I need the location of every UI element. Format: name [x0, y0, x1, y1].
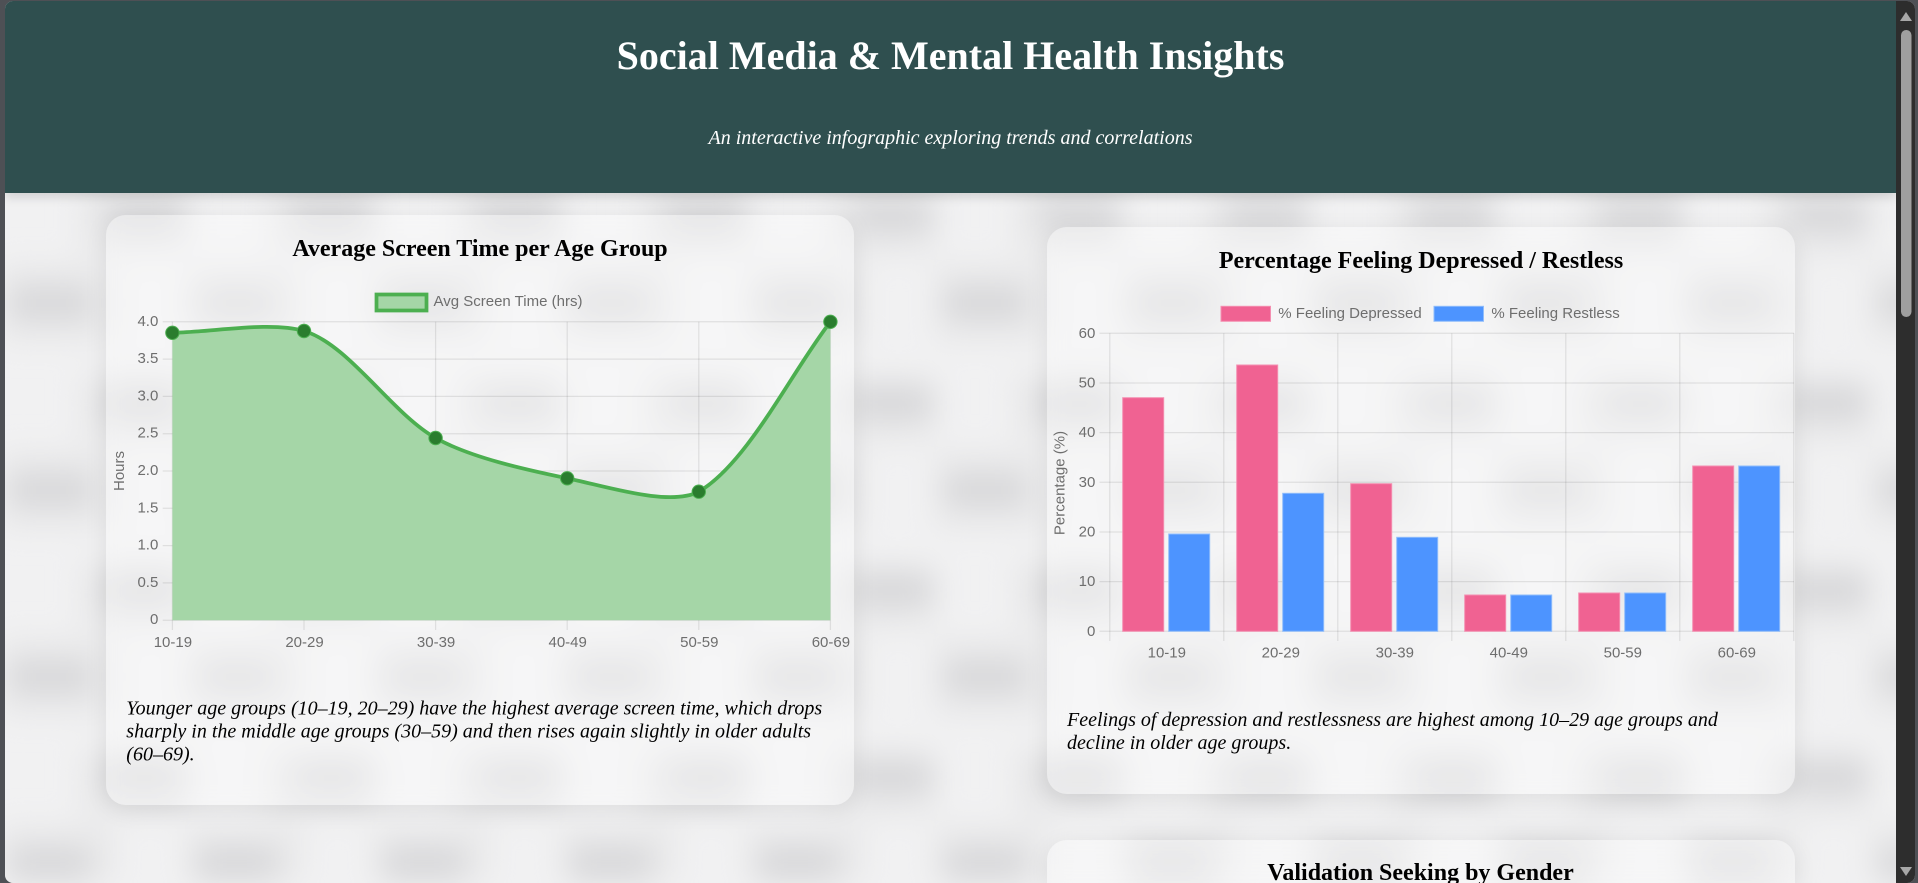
- grouped bar chart: depressed and restless by age: 40-49: [1490, 644, 1528, 661]
- area line chart: screen time by age: 30-39: [417, 634, 455, 651]
- text block: depression and restlessness insight: decline in older age groups.: [1067, 732, 1291, 754]
- grouped bar chart: depressed and restless by age: 30: [1079, 474, 1095, 491]
- text block: screen time insight: (60–69).: [126, 743, 195, 765]
- grouped bar chart: depressed and restless by age: Percentage (%): [1052, 431, 1068, 535]
- text block: screen time insight: Younger age groups (10–19, 20–29) have the highest average screen time, which drops: [126, 697, 822, 719]
- legend: depressed and restless: % Feeling Depressed: [1278, 305, 1422, 322]
- area line chart: screen time by age: 1.5: [137, 499, 158, 516]
- legend: depressed and restless: [1221, 305, 1620, 322]
- area line chart: screen time by age: 0: [150, 611, 158, 628]
- area line chart: screen time by age: Hours: [111, 451, 128, 491]
- grouped bar chart: depressed and restless by age: 50-59: [1604, 644, 1642, 661]
- grouped bar chart: depressed and restless by age: 60: [1079, 325, 1095, 342]
- title: Social Media & Mental Health Insights: [617, 33, 1284, 78]
- area line chart: screen time by age: 1.0: [137, 537, 158, 554]
- area line chart: screen time by age: 10-19: [154, 634, 192, 651]
- text block: depression and restlessness insight: Feelings of depression and restlessness are highest among 10–29 age groups and: [1066, 709, 1719, 731]
- panel: validation seeking by gender: [1047, 840, 1795, 883]
- area line chart: screen time by age: 20-29: [285, 634, 324, 651]
- area line chart: screen time by age: 4.0: [137, 313, 158, 330]
- text block: screen time insight: sharply in the middle age groups (30–59) and then rises again slightly in older adults: [126, 720, 811, 742]
- header banner: [5, 1, 1896, 193]
- area line chart: screen time by age: [111, 313, 850, 651]
- grouped bar chart: depressed and restless by age: 10: [1079, 573, 1095, 590]
- scrollbar: [1896, 1, 1915, 883]
- grouped bar chart: depressed and restless by age: 60-69: [1718, 644, 1756, 661]
- area line chart: screen time by age: 40-49: [549, 634, 587, 651]
- grouped bar chart: depressed and restless by age: [1052, 325, 1794, 661]
- panel: percentage feeling depressed or restless: [1047, 227, 1795, 794]
- icon: scroll up arrow: [1900, 12, 1912, 21]
- icon: scroll down arrow: [1900, 867, 1912, 876]
- grouped bar chart: depressed and restless by age: 10-19: [1148, 644, 1186, 661]
- grouped bar chart: depressed and restless by age: 20-29: [1262, 644, 1300, 661]
- subtitle: An interactive infographic exploring trends and correlations: [706, 127, 1193, 149]
- grouped bar chart: depressed and restless by age: 0: [1087, 623, 1095, 640]
- scrollbar thumb: [1901, 30, 1912, 317]
- area line chart: screen time by age: 3.5: [137, 350, 158, 367]
- grouped bar chart: depressed and restless by age: 50: [1079, 374, 1095, 392]
- heading: depressed and restless: Percentage Feeling Depressed / Restless: [1219, 248, 1623, 274]
- grouped bar chart: depressed and restless by age: 30-39: [1376, 644, 1414, 661]
- area line chart: screen time by age: 60-69: [812, 634, 850, 651]
- area line chart: screen time by age: 0.5: [137, 574, 158, 591]
- area line chart: screen time by age: 2.5: [137, 425, 158, 442]
- area line chart: screen time by age: 50-59: [680, 634, 718, 651]
- area line chart: screen time by age: 2.0: [137, 462, 158, 479]
- grouped bar chart: depressed and restless by age: 20: [1079, 524, 1095, 540]
- legend: depressed and restless: % Feeling Restless: [1491, 305, 1620, 322]
- legend: avg screen time: Avg Screen Time (hrs): [434, 293, 582, 310]
- panel: average screen time: [106, 215, 854, 805]
- grouped bar chart: depressed and restless by age: 40: [1079, 424, 1095, 441]
- heading: average screen time: Average Screen Time per Age Group: [292, 236, 668, 262]
- area line chart: screen time by age: 3.0: [137, 387, 158, 404]
